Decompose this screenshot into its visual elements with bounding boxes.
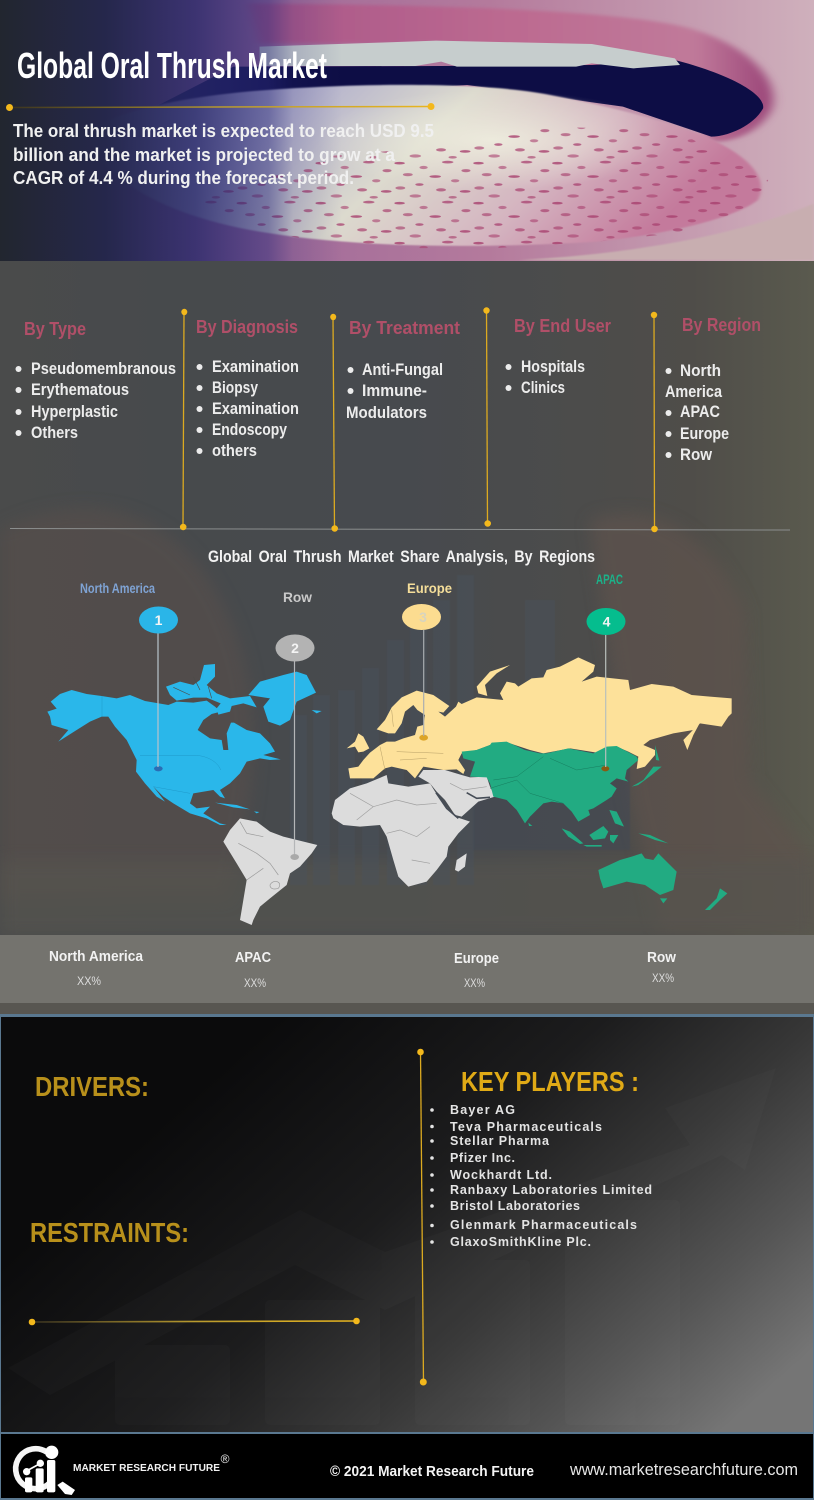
callout: north america pin (80, 580, 178, 767)
panel: regional shares: APAC (235, 950, 271, 966)
heading: market share analysis: Global Oral Thrush Market Share Analysis, By Regions (208, 548, 595, 566)
website: www.marketresearchfuture.com (569, 1461, 798, 1479)
callout: europe pin (402, 580, 452, 736)
panel: regional shares: XX% (464, 976, 485, 990)
heading: drivers: DRIVERS: (35, 1071, 149, 1102)
callout: row pin (276, 589, 314, 854)
text block: market summary: The oral thrush market is expected to reach USD 9.5 (13, 121, 434, 141)
panel: by treatment (346, 318, 460, 422)
panel: regional shares: XX% (77, 974, 101, 988)
panel: by end user: By End User (514, 316, 611, 336)
title: Global Oral Thrush Market (17, 45, 327, 86)
text block: market summary: CAGR of 4.4 % during the forecast period. (13, 168, 354, 188)
text block: market summary: billion and the market is projected to grow at a (13, 145, 396, 165)
panel: by region: America (665, 383, 723, 401)
panel: regional shares (0, 935, 814, 1015)
panel: by end user (506, 316, 611, 397)
panel: regional shares: XX% (652, 971, 674, 985)
divider: key players (417, 1049, 427, 1386)
list: key players: Glenmark Pharmaceuticals (450, 1218, 637, 1232)
callout: north america pin: 1 (155, 612, 163, 628)
map: world by region (47, 657, 732, 925)
callout: europe pin: Europe (407, 580, 452, 596)
panel: by region: APAC (680, 403, 720, 421)
map: north america (47, 664, 322, 825)
panel: by treatment: Modulators (346, 404, 427, 422)
icon: market research future logo (16, 1446, 75, 1495)
panel: by type (16, 319, 176, 442)
brand name: MARKET RESEARCH FUTURE (73, 1463, 220, 1474)
registered mark: ® (221, 1452, 230, 1466)
list: key players: Bristol Laboratories (450, 1199, 580, 1213)
list: key players: GlaxoSmithKline Plc. (450, 1235, 591, 1249)
panel: by type: By Type (24, 319, 86, 339)
callout: apac pin: 4 (603, 614, 611, 630)
panel: by treatment: Anti-Fungal (362, 361, 443, 379)
panel: by end user: Clinics (521, 379, 565, 397)
panel: header photo (0, 0, 814, 261)
dividers: segment columns (10, 307, 790, 532)
list: key players: Pfizer Inc. (450, 1151, 515, 1165)
callout: apac pin (586, 571, 626, 767)
panel: by type: Pseudomembranous (31, 360, 176, 378)
copyright: © 2021 Market Research Future (330, 1464, 534, 1480)
panel: by region: Row (680, 446, 712, 464)
panel: by end user: Hospitals (521, 358, 585, 376)
panel: by region: Europe (680, 425, 729, 443)
panel: footer (0, 1432, 814, 1500)
panel: regional shares: Europe (454, 951, 499, 967)
panel: regional shares: North America (49, 949, 144, 965)
list: key players: Ranbaxy Laboratories Limited (450, 1183, 652, 1197)
heading: restraints: RESTRAINTS: (30, 1217, 189, 1248)
panel: by diagnosis: Examination (212, 400, 299, 418)
panel: regional shares: XX% (244, 976, 266, 990)
panel: by region: By Region (682, 315, 761, 335)
panel: by type: Hyperplastic (31, 403, 118, 421)
panel: segments and map background (0, 261, 814, 1015)
panel: by diagnosis: others (212, 442, 257, 460)
divider: header (6, 103, 434, 111)
panel: drivers, restraints and key players (0, 1014, 814, 1433)
panel: by type: Others (31, 424, 78, 442)
panel: regional shares: Row (647, 950, 677, 966)
text block: market summary (13, 121, 434, 188)
panel: by diagnosis: By Diagnosis (196, 317, 298, 337)
callout: north america pin: North America (80, 580, 155, 596)
panel: by diagnosis: Biopsy (212, 379, 259, 397)
panel: by diagnosis: Examination (212, 358, 299, 376)
list: key players (430, 1103, 652, 1249)
panel: by treatment: By Treatment (349, 318, 460, 338)
panel: by region: North (680, 362, 721, 380)
callout: row pin: 2 (291, 640, 299, 656)
list: key players: Wockhardt Ltd. (450, 1168, 552, 1182)
list: key players: Stellar Pharma (450, 1134, 550, 1148)
marker: north america pin (154, 766, 163, 771)
callout: europe pin: 3 (419, 609, 427, 625)
map: africa and middle east (332, 770, 495, 887)
list: key players: Bayer AG (450, 1103, 515, 1117)
panel: by region (665, 315, 761, 464)
panel: by diagnosis (196, 317, 299, 460)
map: asia pacific (462, 742, 727, 910)
panel: by type: Erythematous (31, 381, 129, 399)
panel: by treatment: Immune- (362, 382, 427, 400)
map: europe and russia (347, 657, 732, 778)
divider: restraints (29, 1318, 360, 1325)
callout: apac pin: APAC (596, 571, 623, 587)
list: key players: Teva Pharmaceuticals (450, 1120, 602, 1134)
heading: key players: KEY PLAYERS : (461, 1066, 639, 1097)
map: south america (223, 818, 317, 925)
panel: by diagnosis: Endoscopy (212, 421, 288, 439)
callout: row pin: Row (283, 589, 312, 605)
